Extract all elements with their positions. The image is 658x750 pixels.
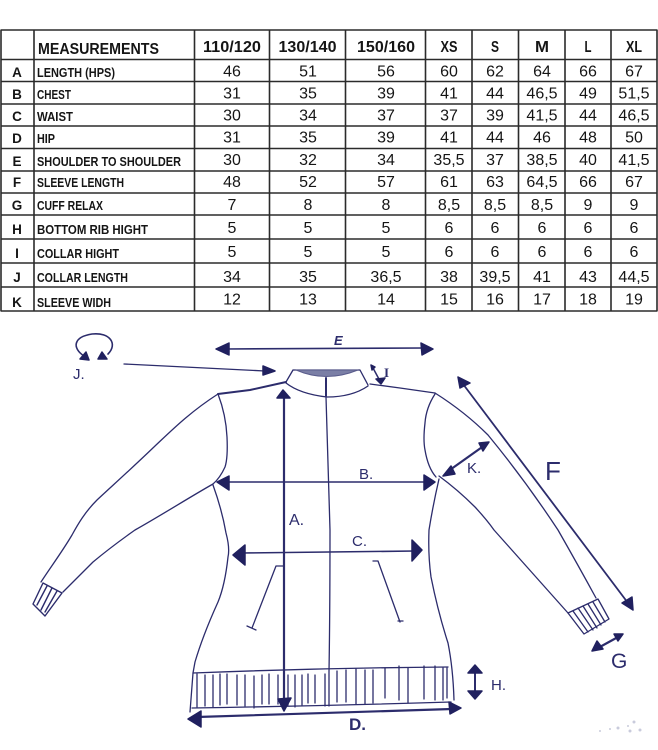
row B: chest: 35 — [299, 86, 317, 102]
table header row: 150/160 — [357, 39, 415, 56]
row C: waist: 37 — [377, 108, 395, 124]
row C: waist: 37 — [440, 108, 458, 124]
row G: cuff relax — [12, 197, 639, 214]
row F: sleeve length — [13, 174, 643, 191]
row I: collar hight — [15, 244, 639, 261]
row C: waist: 44 — [579, 108, 597, 124]
row D: hip: HIP — [37, 131, 55, 146]
row H: bottom rib hight: 5 — [304, 220, 313, 237]
arrow E: shoulder to shoulder — [216, 333, 433, 355]
row A: length: 67 — [625, 64, 643, 80]
row A: length: A — [12, 65, 22, 80]
arrow B: chest: B. — [359, 466, 373, 483]
arrow A: length: A. — [289, 512, 304, 529]
row B: chest: 39 — [377, 86, 395, 102]
table header row: 130/140 — [278, 39, 336, 56]
arrow H: bottom rib hight: H. — [491, 677, 506, 694]
arrow F: sleeve length — [458, 377, 633, 610]
row C: waist: 41,5 — [526, 108, 558, 124]
row K: sleeve widh: 19 — [625, 292, 643, 308]
row D: hip: 41 — [440, 130, 458, 146]
row K: sleeve widh: 18 — [579, 292, 597, 308]
table header row: M — [535, 39, 549, 56]
row H: bottom rib hight — [12, 220, 639, 237]
row G: cuff relax: 9 — [630, 197, 639, 214]
row E: shoulder to shoulder: 40 — [579, 152, 597, 169]
row D: hip: 48 — [579, 130, 597, 146]
row I: collar hight: 6 — [584, 244, 593, 261]
row F: sleeve length: 66 — [579, 174, 597, 191]
table header row: MEASUREMENTS — [38, 41, 159, 58]
row A: length: LENGTH (HPS) — [37, 65, 115, 80]
row I: collar hight: 5 — [228, 244, 237, 261]
row K: sleeve widh: 16 — [486, 292, 504, 308]
row G: cuff relax: G — [12, 198, 22, 213]
row C: waist: 34 — [299, 108, 317, 124]
row C: waist: WAIST — [37, 109, 73, 124]
row D: hip: D — [12, 131, 22, 146]
row H: bottom rib hight: 6 — [538, 220, 547, 237]
bottom rib hem — [192, 666, 451, 708]
row H: bottom rib hight: BOTTOM RIB HIGHT — [37, 222, 148, 237]
row C: waist: 46,5 — [618, 108, 650, 124]
row B: chest: CHEST — [37, 87, 71, 102]
table header row: XL — [626, 39, 642, 56]
row I: collar hight: I — [15, 246, 19, 261]
row F: sleeve length: 63 — [486, 174, 504, 191]
arrow G: cuff relax: G — [611, 650, 627, 673]
row H: bottom rib hight: 6 — [491, 220, 500, 237]
row B: chest: 31 — [223, 86, 241, 102]
row B: chest: 41 — [440, 86, 458, 102]
row I: collar hight: 5 — [304, 244, 313, 261]
arrow B: chest — [217, 466, 435, 490]
row A: length: 64 — [533, 64, 551, 80]
row I: collar hight: 6 — [445, 244, 454, 261]
left cuff — [33, 583, 62, 616]
row D: hip: 35 — [299, 130, 317, 146]
row B: chest: 51,5 — [618, 86, 650, 102]
row G: cuff relax: 8,5 — [484, 197, 506, 214]
right pocket — [373, 561, 403, 622]
table header row — [38, 39, 642, 58]
arrow A: length — [277, 390, 304, 711]
row K: sleeve widh: SLEEVE WIDH — [37, 295, 111, 310]
row K: sleeve widh: K — [12, 295, 22, 310]
row E: shoulder to shoulder: E — [12, 154, 22, 169]
arrow C: waist — [233, 533, 422, 565]
arrow H: bottom rib hight — [468, 665, 506, 699]
arrow E: shoulder to shoulder: E — [334, 333, 343, 348]
row H: bottom rib hight: H — [12, 222, 22, 237]
sweater technical sketch — [33, 333, 633, 734]
row K: sleeve widh: 12 — [223, 292, 241, 308]
row E: shoulder to shoulder: 34 — [377, 152, 395, 169]
row G: cuff relax: CUFF RELAX — [37, 198, 103, 213]
collar shading — [296, 370, 358, 376]
row J: collar length: 41 — [533, 269, 551, 286]
row B: chest: 49 — [579, 86, 597, 102]
row H: bottom rib hight: 5 — [382, 220, 391, 237]
row K: sleeve widh: 17 — [533, 292, 551, 308]
row C: waist: 30 — [223, 108, 241, 124]
row G: cuff relax: 8,5 — [438, 197, 460, 214]
row G: cuff relax: 7 — [228, 197, 237, 214]
row H: bottom rib hight: 6 — [630, 220, 639, 237]
row I: collar hight: 6 — [630, 244, 639, 261]
row J: collar length: J — [13, 270, 21, 285]
row D: hip: 50 — [625, 130, 643, 146]
row D: hip: 39 — [377, 130, 395, 146]
row G: cuff relax: 8 — [304, 197, 313, 214]
row B: chest — [12, 86, 650, 102]
arrow J: collar length — [73, 334, 275, 383]
row D: hip: 44 — [486, 130, 504, 146]
arrow C: waist: C. — [352, 533, 367, 550]
right cuff — [568, 599, 609, 634]
row K: sleeve widh: 14 — [377, 292, 395, 308]
row E: shoulder to shoulder: 41,5 — [618, 152, 650, 169]
table header row: L — [584, 39, 592, 56]
row J: collar length: 43 — [579, 269, 597, 286]
row F: sleeve length: F — [13, 175, 21, 190]
arrow I: collar hight — [371, 365, 389, 384]
row B: chest: 44 — [486, 86, 504, 102]
row A: length: 56 — [377, 64, 395, 80]
row F: sleeve length: 64,5 — [526, 174, 558, 191]
row A: length: 66 — [579, 64, 597, 80]
row J: collar length: 36,5 — [370, 269, 402, 286]
row J: collar length: 44,5 — [618, 269, 650, 286]
row G: cuff relax: 8 — [382, 197, 391, 214]
row C: waist: 39 — [486, 108, 504, 124]
row E: shoulder to shoulder: SHOULDER TO SHOULDER — [37, 154, 182, 169]
table header row: XS — [440, 39, 458, 56]
row I: collar hight: 6 — [538, 244, 547, 261]
row F: sleeve length: 48 — [223, 174, 241, 191]
row G: cuff relax: 8,5 — [531, 197, 553, 214]
row A: length: 51 — [299, 64, 317, 80]
row F: sleeve length: SLEEVE LENGTH — [37, 175, 124, 190]
size table — [0, 30, 658, 311]
row G: cuff relax: 9 — [584, 197, 593, 214]
row D: hip: 31 — [223, 130, 241, 146]
row E: shoulder to shoulder: 30 — [223, 152, 241, 169]
row J: collar length — [13, 269, 650, 286]
row E: shoulder to shoulder: 35,5 — [433, 152, 465, 169]
row E: shoulder to shoulder: 32 — [299, 152, 317, 169]
row D: hip — [12, 130, 643, 146]
arrow D: hip — [188, 702, 461, 734]
arrow I: collar hight: I — [384, 365, 389, 380]
row C: waist: C — [12, 109, 22, 124]
row A: length: 60 — [440, 64, 458, 80]
arrow D: hip: D. — [349, 715, 366, 734]
arrow K: sleeve widh: K. — [467, 460, 481, 477]
row D: hip: 46 — [533, 130, 551, 146]
left pocket — [247, 566, 283, 630]
row E: shoulder to shoulder — [12, 152, 650, 169]
row J: collar length: COLLAR LENGTH — [37, 270, 128, 285]
row F: sleeve length: 61 — [440, 174, 458, 191]
row A: length: 46 — [223, 64, 241, 80]
row F: sleeve length: 52 — [299, 174, 317, 191]
row K: sleeve widh — [12, 292, 643, 310]
row A: length — [12, 64, 643, 80]
arrow G: cuff relax — [592, 634, 627, 673]
row I: collar hight: 6 — [491, 244, 500, 261]
row J: collar length: 38 — [440, 269, 458, 286]
row B: chest: B — [12, 87, 22, 102]
row I: collar hight: 5 — [382, 244, 391, 261]
row E: shoulder to shoulder: 38,5 — [526, 152, 558, 169]
row K: sleeve widh: 13 — [299, 292, 317, 308]
row J: collar length: 35 — [299, 269, 317, 286]
row K: sleeve widh: 15 — [440, 292, 458, 308]
row F: sleeve length: 57 — [377, 174, 395, 191]
row C: waist — [12, 108, 650, 124]
row J: collar length: 39,5 — [479, 269, 511, 286]
row B: chest: 46,5 — [526, 86, 558, 102]
arrow F: sleeve length: F — [545, 456, 561, 486]
sweater outline — [41, 370, 596, 712]
row J: collar length: 34 — [223, 269, 241, 286]
table header row: S — [491, 39, 499, 56]
row F: sleeve length: 67 — [625, 174, 643, 191]
table header row: 110/120 — [203, 39, 261, 56]
row H: bottom rib hight: 5 — [228, 220, 237, 237]
row H: bottom rib hight: 6 — [584, 220, 593, 237]
row E: shoulder to shoulder: 37 — [486, 152, 504, 169]
row H: bottom rib hight: 6 — [445, 220, 454, 237]
arrow K: sleeve widh — [443, 442, 489, 477]
row A: length: 62 — [486, 64, 504, 80]
row I: collar hight: COLLAR HIGHT — [37, 246, 119, 261]
arrow J: collar length: J. — [73, 366, 85, 383]
